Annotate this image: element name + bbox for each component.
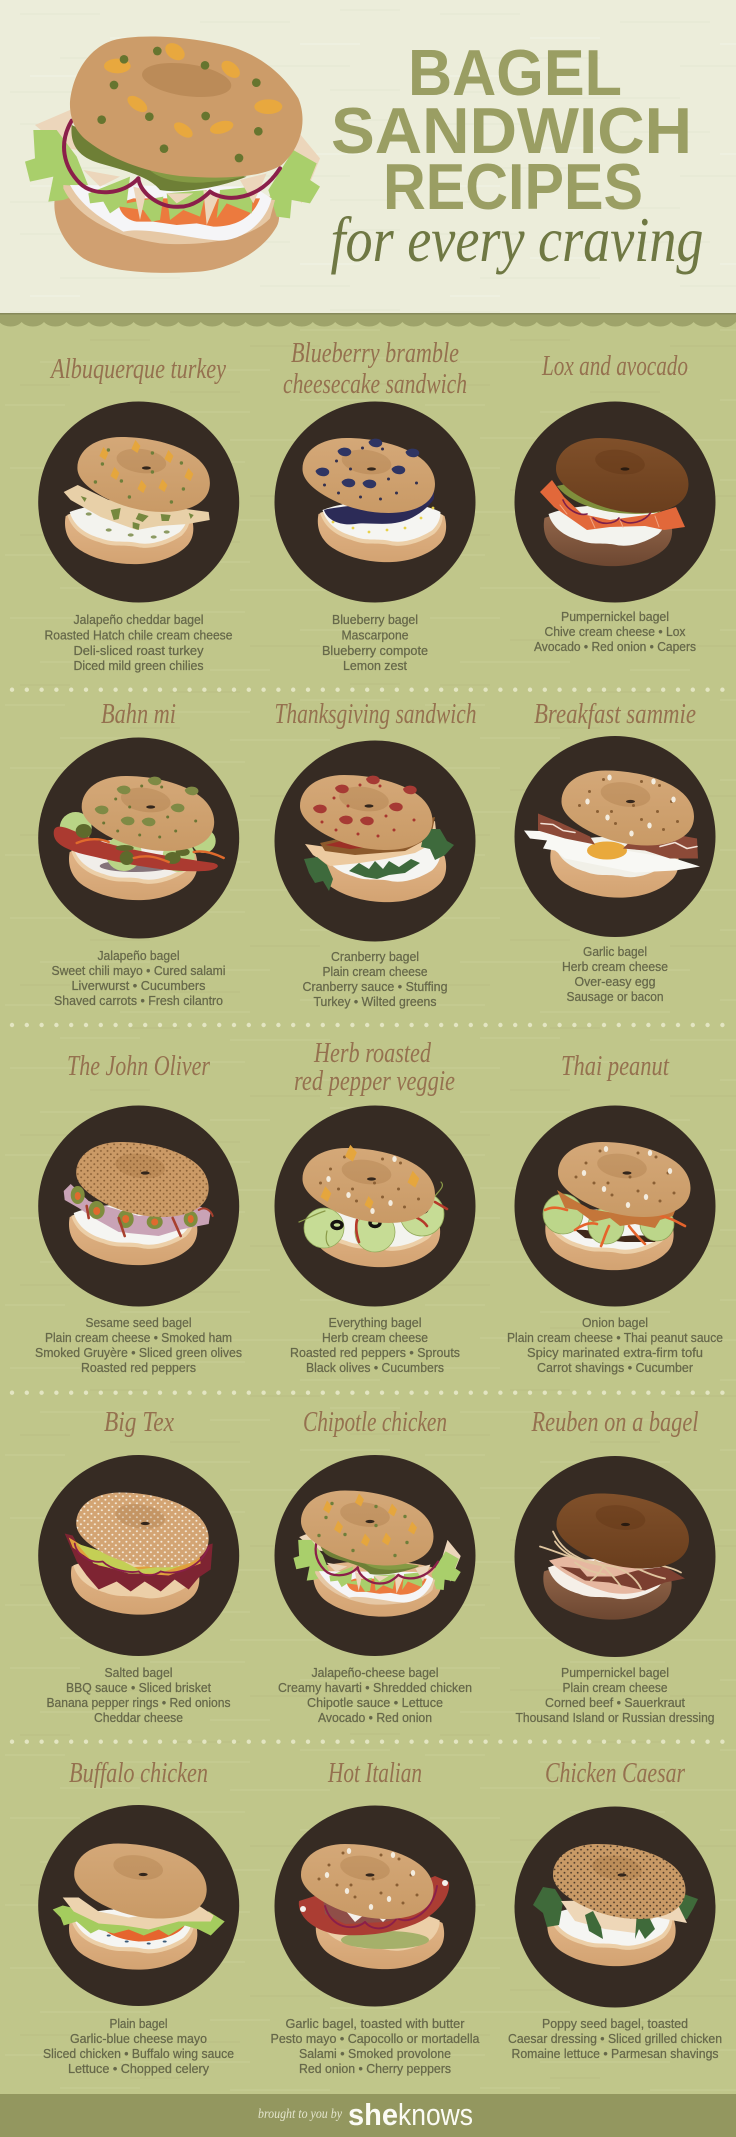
panel: The John Oliver xyxy=(35,1051,242,1375)
ingredient list xyxy=(516,1666,715,1725)
ingredient list: Garlic bagel xyxy=(583,945,647,959)
ingredient list: Jalapeño-cheese bagel xyxy=(312,1666,438,1680)
footer xyxy=(0,2094,736,2137)
ingredient list: Jalapeño bagel xyxy=(98,949,180,963)
heading: Blueberry bramble cheesecake sandwich xyxy=(283,338,467,400)
ingredient list: Sweet chili mayo • Cured salami xyxy=(52,964,226,978)
ingredient list: Mascarpone xyxy=(342,628,409,642)
ingredient list: Creamy havarti • Shredded chicken xyxy=(278,1681,472,1695)
ingredient list xyxy=(278,1666,472,1725)
heading: Herb roasted red pepper veggie xyxy=(294,1038,455,1097)
illustration: lox bagel xyxy=(514,402,716,602)
heading: Reuben on a bagel: Reuben on a bagel xyxy=(531,1407,699,1438)
ingredient list: Corned beef • Sauerkraut xyxy=(545,1696,686,1710)
ingredient list: Plain cream cheese • Thai peanut sauce xyxy=(507,1331,723,1345)
scalloped band xyxy=(0,313,736,327)
ingredient list: Avocado • Red onion xyxy=(318,1711,432,1725)
illustration: breakfast bagel xyxy=(514,736,716,937)
ingredient list: Chipotle sauce • Lettuce xyxy=(307,1696,443,1710)
ingredient list: Blueberry bagel xyxy=(332,613,418,627)
ingredient list xyxy=(562,945,668,1004)
ingredient list: Cranberry bagel xyxy=(331,950,419,964)
ingredient list: Liverwurst • Cucumbers xyxy=(72,979,206,993)
ingredient list: Lemon zest xyxy=(343,659,408,673)
ingredient list: Herb cream cheese xyxy=(322,1331,428,1345)
ingredient list xyxy=(46,1666,230,1725)
illustration: blueberry bagel xyxy=(274,402,476,602)
ingredient list: Everything bagel xyxy=(328,1316,422,1330)
header panel xyxy=(0,0,736,313)
credit line: brought to you by xyxy=(258,2107,343,2122)
heading: Chicken Caesar: Chicken Caesar xyxy=(545,1758,685,1789)
illustration: Albuquerque turkey bagel xyxy=(38,402,239,602)
illustration: Chicken Caesar bagel xyxy=(514,1806,716,2008)
ingredient list: Salted bagel xyxy=(104,1666,172,1680)
ingredient list: Deli-sliced roast turkey xyxy=(74,644,204,658)
ingredient list: Onion bagel xyxy=(582,1316,648,1330)
ingredient list xyxy=(534,610,696,654)
ingredient list xyxy=(508,2017,722,2061)
ingredient list: Jalapeño cheddar bagel xyxy=(74,613,204,627)
panel: Thai peanut xyxy=(507,1051,723,1375)
ingredient list: Sliced chicken • Buffalo wing sauce xyxy=(43,2047,234,2061)
heading: Breakfast sammie: Breakfast sammie xyxy=(534,699,696,730)
illustration: Hot Italian bagel xyxy=(274,1806,476,2006)
ingredient list: Cranberry sauce • Stuffing xyxy=(302,980,448,994)
panel: Buffalo chicken xyxy=(38,1758,239,2076)
illustration: bahn mi bagel xyxy=(38,738,239,938)
title: SANDWICH xyxy=(331,94,692,167)
illustration: Buffalo chicken bagel xyxy=(38,1805,239,2006)
illustration: Chipotle chicken bagel xyxy=(274,1455,476,1656)
panel: Big Tex xyxy=(38,1407,239,1725)
ingredient list xyxy=(507,1316,723,1375)
illustration: Thai peanut bagel xyxy=(514,1106,716,1306)
illustration: Reuben bagel xyxy=(514,1456,716,1657)
panel: Lox and avocado xyxy=(514,351,716,654)
ingredient list: Cheddar cheese xyxy=(94,1711,183,1725)
heading: Herb roasted red pepper veggie: red pepper veggie xyxy=(294,1066,455,1097)
ingredient list: Lettuce • Chopped celery xyxy=(68,2062,210,2076)
ingredient list: Avocado • Red onion • Capers xyxy=(534,640,696,654)
ingredient list xyxy=(270,2017,480,2076)
heading: Albuquerque turkey: Albuquerque turkey xyxy=(49,354,226,385)
panel: Breakfast sammie xyxy=(514,699,716,1004)
panel: Hot Italian xyxy=(270,1758,480,2076)
ingredient list: Red onion • Cherry peppers xyxy=(299,2062,451,2076)
heading: Herb roasted red pepper veggie: Herb roasted xyxy=(313,1038,432,1069)
ingredient list: Garlic-blue cheese mayo xyxy=(70,2032,207,2046)
ingredient list: Banana pepper rings • Red onions xyxy=(46,1696,230,1710)
title: BAGEL xyxy=(408,36,622,109)
ingredient list xyxy=(302,950,448,1009)
heading: Blueberry bramble cheesecake sandwich: Blueberry bramble xyxy=(291,338,459,369)
ingredient list: Poppy seed bagel, toasted xyxy=(542,2017,688,2031)
ingredient list xyxy=(52,949,226,1008)
ingredient list: Over-easy egg xyxy=(574,975,656,989)
logo: sheknows xyxy=(348,2097,473,2132)
ingredient list: Plain cream cheese xyxy=(562,1681,668,1695)
ingredient list: Plain bagel xyxy=(110,2017,168,2031)
ingredient list: Romaine lettuce • Parmesan shavings xyxy=(512,2047,718,2061)
ingredient list: Diced mild green chilies xyxy=(74,659,204,673)
heading: Buffalo chicken: Buffalo chicken xyxy=(69,1758,208,1789)
ingredient list: Chive cream cheese • Lox xyxy=(544,625,686,639)
title xyxy=(331,36,692,223)
ingredient list: Sausage or bacon xyxy=(566,990,664,1004)
heading: Blueberry bramble cheesecake sandwich: cheesecake sandwich xyxy=(283,369,467,400)
ingredient list: Roasted red peppers xyxy=(81,1361,196,1375)
ingredient list: Thousand Island or Russian dressing xyxy=(516,1711,715,1725)
ingredient list: Plain cream cheese xyxy=(322,965,428,979)
illustration: veggie bagel xyxy=(274,1106,476,1306)
ingredient list xyxy=(44,613,233,673)
panel: Bahn mi xyxy=(38,699,239,1008)
panel: Chipotle chicken xyxy=(274,1407,476,1725)
ingredient list: BBQ sauce • Sliced brisket xyxy=(66,1681,212,1695)
heading: Bahn mi: Bahn mi xyxy=(101,699,176,730)
heading: Thai peanut: Thai peanut xyxy=(561,1051,670,1082)
ingredient list: Shaved carrots • Fresh cilantro xyxy=(54,994,223,1008)
title: RECIPES xyxy=(383,150,643,223)
ingredient list: Turkey • Wilted greens xyxy=(314,995,436,1009)
ingredient list: Pumpernickel bagel xyxy=(561,1666,669,1680)
heading: Thanksgiving sandwich: Thanksgiving sandwich xyxy=(274,699,476,730)
panel: Herb roasted red pepper veggie xyxy=(274,1038,476,1375)
ingredient list xyxy=(35,1316,242,1375)
ingredient list: Roasted Hatch chile cream cheese xyxy=(44,628,233,642)
heading: Chipotle chicken: Chipotle chicken xyxy=(303,1407,447,1438)
heading: Hot Italian: Hot Italian xyxy=(327,1758,422,1789)
ingredient list: Black olives • Cucumbers xyxy=(306,1361,444,1375)
heading: The John Oliver: The John Oliver xyxy=(67,1051,210,1082)
illustration: John Oliver bagel xyxy=(38,1106,239,1306)
ingredient list: Blueberry compote xyxy=(322,644,428,658)
panel: Reuben on a bagel xyxy=(514,1407,716,1725)
ingredient list: Pesto mayo • Capocollo or mortadella xyxy=(270,2032,480,2046)
ingredient list xyxy=(290,1316,460,1375)
ingredient list: Plain cream cheese • Smoked ham xyxy=(45,1331,232,1345)
ingredient list xyxy=(43,2017,234,2076)
heading: Big Tex: Big Tex xyxy=(104,1407,174,1438)
illustration: Big Tex bagel xyxy=(38,1455,239,1656)
ingredient list: Garlic bagel, toasted with butter xyxy=(286,2017,464,2031)
illustration: Thanksgiving bagel xyxy=(274,740,476,942)
panel: Thanksgiving sandwich xyxy=(274,699,476,1009)
ingredient list: Caesar dressing • Sliced grilled chicken xyxy=(508,2032,722,2046)
panel: Albuquerque turkey xyxy=(38,354,239,673)
panel: Blueberry bramble cheesecake sandwich xyxy=(274,338,476,673)
ingredient list: Pumpernickel bagel xyxy=(561,610,669,624)
ingredient list: Salami • Smoked provolone xyxy=(299,2047,451,2061)
ingredient list: Sesame seed bagel xyxy=(86,1316,192,1330)
logo: sheknows: knows xyxy=(398,2097,473,2132)
panel: Chicken Caesar xyxy=(508,1758,722,2061)
ingredient list: Spicy marinated extra-firm tofu xyxy=(527,1346,703,1360)
ingredient list: Carrot shavings • Cucumber xyxy=(537,1361,693,1375)
ingredient list: Smoked Gruyère • Sliced green olives xyxy=(35,1346,242,1360)
ingredient list: Herb cream cheese xyxy=(562,960,668,974)
header illustration: bagel sandwich xyxy=(25,36,320,273)
ingredient list xyxy=(322,613,428,673)
ingredient list: Roasted red peppers • Sprouts xyxy=(290,1346,460,1360)
heading: Lox and avocado: Lox and avocado xyxy=(541,351,688,382)
logo: sheknows: she xyxy=(348,2097,398,2132)
